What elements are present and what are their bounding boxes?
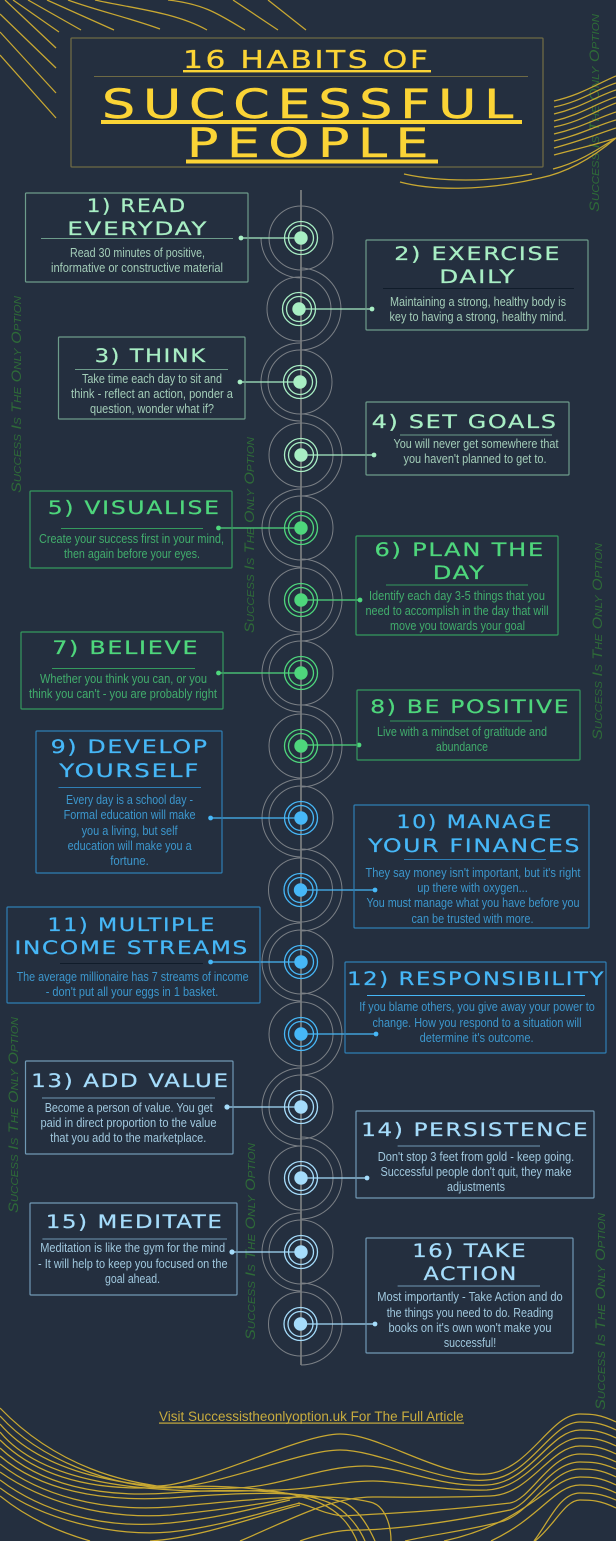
body: 3 xyxy=(71,372,233,416)
body: 3: question, wonder what if? xyxy=(90,402,214,416)
node 14 xyxy=(269,1146,369,1210)
body: 9: fortune. xyxy=(110,854,149,868)
body: 6 xyxy=(366,589,548,633)
body: 9: Every day is a school day - xyxy=(66,793,193,807)
body: 13: that you add to the marketplace. xyxy=(50,1131,206,1145)
body: 5: then again before your eyes. xyxy=(64,547,200,561)
heading: 13: 13) ADD VALUE xyxy=(31,1070,230,1092)
heading: 1 xyxy=(67,195,208,240)
body: 12: change. How you respond to a situation will xyxy=(372,1016,582,1030)
heading: 1: EVERYDAY xyxy=(67,218,208,240)
node 10 xyxy=(268,858,377,922)
heading: 12: 12) RESPONSIBILITY xyxy=(347,968,605,990)
heading: 10: 10) MANAGE xyxy=(396,811,553,833)
body: 13: Become a person of value. You get xyxy=(45,1101,213,1115)
body: 8: Live with a mindset of gratitude and xyxy=(377,725,547,739)
heading: 8: 8) BE POSITIVE xyxy=(370,696,570,718)
body: 14 xyxy=(378,1150,574,1194)
heading: 6: 6) PLAN THE xyxy=(374,539,545,561)
body: 10 xyxy=(366,866,581,926)
body: 2: Maintaining a strong, healthy body is xyxy=(390,295,566,309)
heading: 11: 11) MULTIPLE xyxy=(47,914,216,936)
body: 1 xyxy=(51,246,223,275)
panel: 1 read everyday xyxy=(26,193,248,282)
body: 4: You will never get somewhere that xyxy=(394,437,559,451)
heading: 2: 2) EXERCISE xyxy=(394,243,561,265)
body: 14: Don't stop 3 feet from gold - keep going. xyxy=(378,1150,574,1164)
heading: 10 xyxy=(367,811,581,857)
body: 14: adjustments xyxy=(447,1180,505,1194)
heading: 14: 14) PERSISTENCE xyxy=(361,1119,589,1141)
body: 11: The average millionaire has 7 streams of income xyxy=(17,970,249,984)
title line: successful: SUCCESSFUL xyxy=(102,82,521,128)
body: 7: think you can't - you are probably right xyxy=(29,687,217,701)
body: 15: - It will help to keep you focused on the xyxy=(38,1257,228,1271)
body: 3: Take time each day to sit and xyxy=(82,372,222,386)
body: 4 xyxy=(394,437,559,466)
body: 15: goal ahead. xyxy=(105,1272,160,1286)
node 11 xyxy=(208,930,333,994)
body: 6: move you towards your goal xyxy=(390,619,525,633)
body: 3: think - reflect an action, ponder a xyxy=(71,387,233,401)
body: 16: Most importantly - Take Action and do xyxy=(377,1290,563,1304)
panel: 12 responsibility xyxy=(345,962,606,1053)
body: 10: You must manage what you have before you xyxy=(366,896,580,910)
side text: success is the only option, top right: Success Is The Only Option xyxy=(586,13,602,212)
side text: success is the only option, lower middle: Success Is The Only Option xyxy=(242,1142,258,1340)
body: 16: successful! xyxy=(444,1336,496,1350)
body: 4: you haven't planned to get to. xyxy=(404,452,546,466)
body: 16 xyxy=(377,1290,563,1350)
node 9 xyxy=(208,786,333,850)
body: 11: - don't put all your eggs in 1 basket. xyxy=(46,985,218,999)
body: 6: Identify each day 3-5 things that you xyxy=(369,589,545,603)
panel: 11 multiple income streams xyxy=(7,907,260,1003)
title line: people: PEOPLE xyxy=(187,121,437,167)
node 16 xyxy=(268,1292,377,1356)
node 4 xyxy=(269,423,376,487)
body: 10: can be trusted with more. xyxy=(412,912,534,926)
body: 15 xyxy=(38,1241,228,1286)
side text: success is the only option, upper left: Success Is The Only Option xyxy=(8,295,24,493)
body: 15: Meditation is like the gym for the mind xyxy=(40,1241,225,1255)
timeline spine with curved arcs xyxy=(261,190,342,1365)
heading: 2 xyxy=(394,243,561,288)
body: 11 xyxy=(17,970,249,999)
node 13 xyxy=(224,1075,333,1139)
node 5 xyxy=(216,496,333,560)
heading: 16: 16) TAKE xyxy=(412,1240,527,1262)
panel: 8 be positive xyxy=(357,690,580,760)
side text: success is the only option, lower right: Success Is The Only Option xyxy=(592,1212,608,1410)
panel: 15 meditate xyxy=(30,1203,237,1295)
panel: 9 develop yourself xyxy=(36,731,222,873)
node 3 xyxy=(238,350,332,414)
body: 1: Read 30 minutes of positive, xyxy=(70,246,205,260)
panel: 5 visualise xyxy=(30,491,232,568)
body: 9: education will make you a xyxy=(68,839,192,853)
heading: 4: 4) SET GOALS xyxy=(372,411,558,433)
body: 7: Whether you think you can, or you xyxy=(40,672,207,686)
panel: 13 add value xyxy=(26,1061,233,1154)
body: 8 xyxy=(377,725,547,754)
node 6 xyxy=(269,568,362,632)
side text: success is the only option, middle right: Success Is The Only Option xyxy=(589,542,605,740)
title panel xyxy=(71,38,543,167)
body: 16: books on it's own won't make you xyxy=(388,1321,552,1335)
body: 9: Formal education will make xyxy=(64,808,196,822)
panel: 7 believe xyxy=(21,632,223,709)
body: 9 xyxy=(64,793,196,868)
body: 7 xyxy=(29,672,217,701)
body: 6: need to accomplish in the day that will xyxy=(366,604,548,618)
body: 10: They say money isn't important, but it's right xyxy=(366,866,581,880)
heading: 1: 1) READ xyxy=(87,195,187,217)
body: 14: Successful people don't quit, they make xyxy=(380,1165,572,1179)
panel: 16 take action xyxy=(366,1238,573,1353)
decorative wave lines: top right xyxy=(400,76,616,188)
node 7 xyxy=(216,641,333,705)
heading: 9: 9) DEVELOP xyxy=(51,736,209,758)
body: 8: abundance xyxy=(436,740,488,754)
body: 13: paid in direct proportion to the value xyxy=(40,1116,217,1130)
side text: success is the only option, lower left: Success Is The Only Option xyxy=(5,1016,21,1213)
heading: 9: YOURSELF xyxy=(58,760,200,782)
heading: 6: DAY xyxy=(433,562,486,584)
decorative wave lines: bottom xyxy=(0,1408,616,1541)
heading: 7: 7) BELIEVE xyxy=(52,637,199,659)
footer link text: Visit Successistheonlyoption.uk For The Full Article xyxy=(159,1409,464,1424)
heading: 3: 3) THINK xyxy=(95,345,207,367)
panel: 4 set goals xyxy=(366,402,569,475)
body: 10: up there with oxygen... xyxy=(417,881,528,895)
node 8 xyxy=(269,714,361,778)
panel: 10 manage your finances xyxy=(354,805,589,928)
body: 9: you a living, but self xyxy=(82,824,178,838)
body: 13 xyxy=(40,1101,217,1145)
heading: 6 xyxy=(374,539,545,584)
heading: 5: 5) VISUALISE xyxy=(48,497,221,519)
panel: 2 exercise daily xyxy=(366,240,588,330)
heading: 9 xyxy=(51,736,209,782)
body: 12: determine it's outcome. xyxy=(420,1031,534,1045)
heading: 16 xyxy=(412,1240,527,1285)
heading: 2: DAILY xyxy=(439,266,516,288)
body: 2 xyxy=(390,295,566,324)
body: 5 xyxy=(39,532,224,561)
decorative wave lines: top left xyxy=(0,0,306,118)
heading: 16: ACTION xyxy=(423,1263,518,1285)
panel: 14 persistence xyxy=(356,1111,594,1198)
panel: 3 think xyxy=(58,337,245,419)
heading: 11: INCOME STREAMS xyxy=(14,937,249,959)
heading: 11 xyxy=(14,914,249,959)
title line: 16 habits of: 16 HABITS OF xyxy=(183,45,430,74)
node 12 xyxy=(269,1002,378,1066)
heading: 15: 15) MEDITATE xyxy=(46,1211,224,1233)
body: 2: key to having a strong, healthy mind. xyxy=(390,310,566,324)
panel: 6 plan the day xyxy=(356,536,558,635)
body: 1: informative or constructive material xyxy=(51,261,223,275)
node 2 xyxy=(267,277,374,341)
node 1 xyxy=(239,206,333,270)
side text: success is the only option, upper middle: Success Is The Only Option xyxy=(241,436,257,633)
heading: 10: YOUR FINANCES xyxy=(367,835,581,857)
body: 12 xyxy=(359,1000,595,1045)
node 15 xyxy=(229,1220,333,1284)
body: 5: Create your success first in your mind, xyxy=(39,532,224,546)
body: 16: the things you need to do. Reading xyxy=(387,1306,553,1320)
